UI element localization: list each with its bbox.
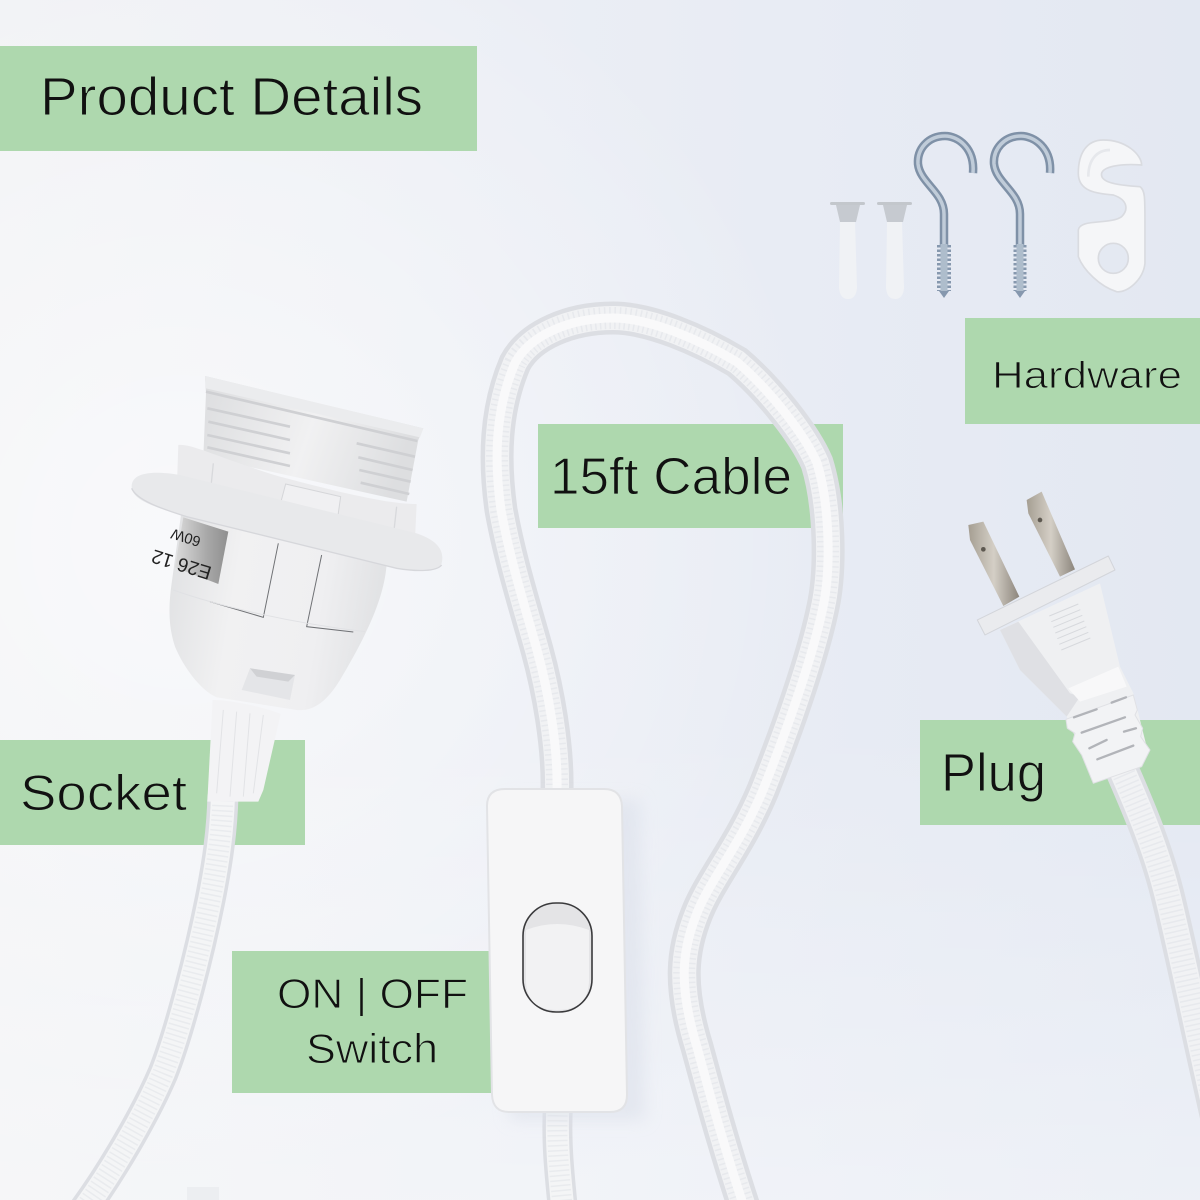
icon: wall anchor 1: [830, 202, 865, 299]
label text: 15ft cable: 15ft Cable: [550, 448, 792, 506]
switch housing: [487, 789, 627, 1112]
plug ridge lines: [1049, 604, 1090, 650]
hardware: anchors, hooks and ceiling clip: [830, 136, 1145, 299]
plug flange: [977, 556, 1115, 635]
socket flange: [132, 473, 442, 570]
socket rating label: 60W: [169, 525, 203, 549]
label panel: plug: [920, 720, 1200, 825]
label text: switch: Switch: [306, 1025, 438, 1072]
cable: below switch: [557, 1105, 563, 1200]
cable: short stub at bottom: [187, 1187, 219, 1200]
label text: hardware: Hardware: [992, 355, 1182, 397]
label panel: hardware: [965, 318, 1200, 424]
switch rocker: [523, 903, 592, 1012]
plug prong left: [968, 522, 1019, 606]
cable: main braided loop: [497, 318, 828, 1200]
socket strain relief: [207, 700, 281, 802]
label text: plug: Plug: [941, 743, 1046, 803]
socket body: [169, 510, 387, 710]
cable: plug lead: [1122, 770, 1200, 1130]
icon: screw hook 2: [994, 136, 1050, 298]
label panel: product details: [0, 46, 477, 151]
lamp socket: [132, 376, 442, 802]
socket rating label: E26 12: [149, 545, 214, 583]
socket clip notch: [242, 668, 295, 700]
label text: on off: ON | OFF: [277, 970, 468, 1017]
socket thread: [203, 376, 423, 502]
socket collar: [177, 445, 417, 540]
icon: screw hook 1: [918, 136, 973, 298]
plug strain relief ribs: [1066, 695, 1150, 783]
label panel: socket: [0, 740, 305, 845]
icon: white ceiling clip: [1078, 140, 1145, 292]
on/off inline switch: [487, 789, 645, 1120]
plug body: [1000, 583, 1147, 770]
socket rating label: [149, 517, 228, 584]
label text: socket: Socket: [20, 765, 187, 821]
plug prong right: [1027, 492, 1075, 577]
socket seams: [210, 543, 353, 632]
icon: wall anchor 2: [877, 202, 912, 299]
cable: socket lead: [80, 795, 223, 1200]
heading: product details: Product Details: [40, 67, 423, 127]
label panel: on off switch: [232, 951, 494, 1093]
switch shadow: [505, 800, 645, 1120]
label panel: 15ft cable: [538, 424, 843, 528]
wall plug: [968, 492, 1150, 783]
